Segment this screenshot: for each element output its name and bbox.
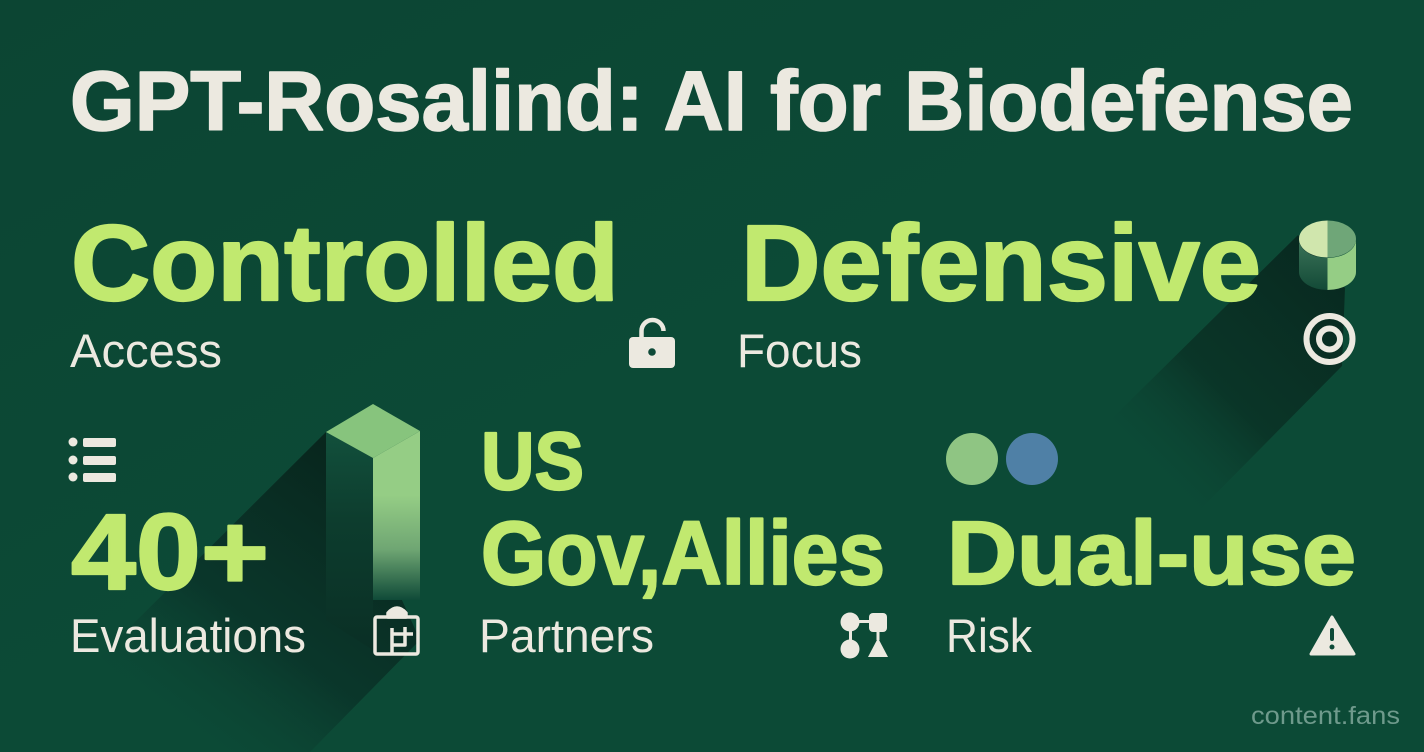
- headline: Dual-use: Dual-use: [947, 504, 1356, 604]
- headline: Defensive: Defensive: [741, 202, 1261, 323]
- icon: cylinder: [1299, 220, 1356, 290]
- metric: controlled access: [70, 202, 675, 377]
- icon: list: [68, 438, 116, 482]
- label: Focus: Focus: [737, 324, 862, 377]
- label: Risk: Risk: [946, 609, 1032, 662]
- icon: clipboard: [375, 608, 418, 654]
- headline: Controlled: Controlled: [71, 202, 619, 323]
- metric: evaluations: [68, 404, 420, 662]
- title: GPT-Rosalind: AI for Biodefense: [70, 54, 1353, 148]
- icon: target: [1306, 316, 1352, 362]
- headline: 40+: 40+: [71, 491, 269, 612]
- headline: US: US: [481, 416, 584, 507]
- label: Access: Access: [70, 324, 222, 377]
- 3D bar: [326, 404, 420, 650]
- headline: Gov,Allies: Gov,Allies: [481, 504, 885, 604]
- watermark: content.fans: [1251, 702, 1400, 730]
- icon: warning triangle: [1311, 617, 1354, 654]
- metric: dual-use risk: [946, 433, 1356, 662]
- metric: defensive focus: [737, 202, 1356, 377]
- icon: two dots: [946, 433, 1058, 485]
- bar long shadow: [100, 432, 420, 752]
- metric: partners: [479, 416, 888, 662]
- label: Evaluations: Evaluations: [70, 609, 306, 662]
- icon: network: [840, 612, 888, 658]
- cylinder long shadow: [1075, 235, 1345, 525]
- label: Partners: Partners: [479, 609, 654, 662]
- icon: open padlock: [629, 320, 675, 368]
